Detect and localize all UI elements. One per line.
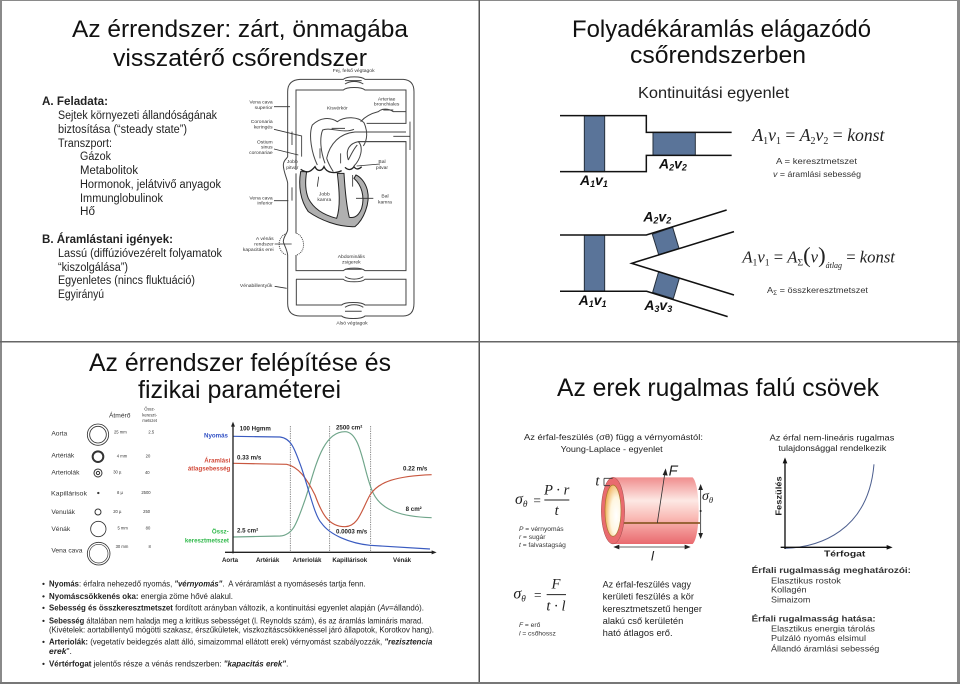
diagram: branching tube: v [594,292,603,308]
legend: formula symbols: r = sugár [519,534,546,541]
illustration: cylinder wall tension: F [669,464,679,480]
axes [225,424,433,553]
diagram labels: bronchiales [374,102,400,108]
formula: summed cross-section: v) [811,243,826,268]
ventricle wall [300,172,368,227]
table: vessel diameters and cross sections: Kapillárisok [51,490,88,497]
value labels: 100 Hgmm [240,425,271,432]
diagram labels: keringés [254,125,273,131]
diagram labels: sinus [261,145,273,151]
formula: continuity: A [799,125,811,145]
table: vessel diameters and cross sections: 8 [148,544,151,549]
diagram: stepped tube: 2 [681,162,687,172]
text block: bullet notes: Sebesség és összkeresztmetszet fordított arányban változik, a kontinuitási egyenlet alapján (Av=állandó). [49,603,424,613]
title: branching flow: csőrendszerben [630,42,806,69]
text block: A. function: Gázok [80,151,111,163]
diagram labels: Bal [381,194,389,200]
legend: continuity symbols [773,156,861,179]
series labels: Nyomás [204,432,229,439]
diagram labels: Fej, felső végtagok [333,68,375,74]
text block: A. function: Immunglobulinok [80,193,163,205]
diagram: branching tube [560,209,734,317]
table: vessel diameters and cross sections: 40 [145,470,150,475]
text block: wall tension definition: alakú cső kerületén [603,616,683,626]
text block: B. flow requirements: Egyenletes (nincs fluktuáció) [58,275,195,287]
diagram labels: Kisvérkör [327,106,348,112]
diagram labels: Jobb [287,159,298,165]
diagram labels: inferior [257,201,273,207]
diagram labels: Ostium [257,139,273,145]
table: vessel diameters and cross sections: 30 mm [116,544,129,549]
curve: pressure [233,436,430,549]
series labels [185,432,231,544]
diagram: branching tube: A [643,209,653,225]
table: vessel diameters and cross sections: Arteriolák [51,470,80,477]
chart: pressure, velocity and cross section along vessels [185,422,437,564]
diagram labels: kamra [317,197,331,203]
text block: effects of elasticity: Érfali rugalmasság hatása: [752,613,876,623]
text block: B. flow requirements: “kiszolgálása”) [58,262,128,274]
formula: tension from force: = [534,588,542,603]
formula: continuity [751,125,886,147]
value labels: 0.0003 m/s [336,528,368,535]
table: vessel diameters and cross sections: Artériák [51,452,75,459]
text block: determinants of elasticity: Simaizom [771,594,810,604]
text block: A. function: A. Feladata: [42,96,108,108]
curve: cross section [233,432,432,537]
text block: B. flow requirements: Lassú (diffúzióvezérelt folyamatok [58,248,222,260]
text block: A. function: Metabolitok [80,165,138,177]
text block: bullet notes: Nyomás: érfalra nehezedő nyomás, "vérnyomás". A véráramlást a nyomásesés tartja fenn. [49,579,366,589]
text block: wall tension definition: keresztmetszetű henger [603,604,702,614]
diagram: branching tube: 3 [654,304,659,314]
text block: determinants of elasticity: Kollagén [771,585,807,595]
illustration: cylinder wall tension: θ [709,495,714,505]
value labels [222,424,428,564]
diagram: branching tube: A [579,292,589,308]
diagram: branching tube: 1 [589,299,594,309]
text block: A. function: biztosítása (“steady state”) [58,124,187,136]
diagram: branching tube: 3 [667,304,672,314]
text block: A. function: Sejtek környezeti állandóságának [58,110,217,122]
diagram: stepped tube: v [595,172,604,188]
section: nonlinear elasticity [752,433,911,654]
table: vessel diameters and cross sections: 4 mm [117,453,128,458]
text block: bullet notes: Arteriolák: (vegetatív beidegzés alatt álló, simaizommal ellátott erek) vérnyomást szabályozzák, "rezisztencia [49,637,433,647]
table: vessel diameters and cross sections: 20 [146,453,151,458]
table: vessel diameters and cross sections: Össz- [144,406,156,411]
diagram: stepped tube: 1 [590,179,595,189]
text block: bullet notes: • [42,658,45,668]
formula: continuity: v [816,125,824,145]
diagram labels: Abdominális [338,254,365,260]
table: vessel diameters and cross sections: 80 [146,525,151,530]
diagram: stepped tube: v [674,155,683,171]
formula: summed cross-section: 1 [753,258,758,269]
table: vessel diameters and cross sections: 25 mm [114,429,127,434]
text block: effects of elasticity: Állandó áramlási sebesség [771,644,880,654]
legend: formula symbols: P = vérnyomás [519,526,564,533]
title: closed circulatory system: Az érrendszer: zárt, önmagába [72,16,408,43]
diagram labels: kamra [378,200,392,206]
heart valves [301,167,362,173]
diagram labels [240,68,400,327]
title: closed circulatory system [72,16,408,72]
illustration: cylinder wall tension: l [651,548,655,563]
diagram: branching tube: v [658,209,667,225]
legend: force symbols: F = erő [519,622,541,629]
diagram: stepped tube: 1 [603,179,608,189]
diagram: stepped tube: A [580,172,590,188]
formula: Young-Laplace: σ [515,491,523,508]
text block: effects of elasticity [752,613,880,654]
text block: bullet notes: erek". [49,646,72,656]
diagram labels: zsigerek [342,260,361,266]
series labels: keresztmetszet [185,537,229,544]
title: elastic-walled tubes: Az erek rugalmas falú csövek [557,374,879,402]
diagram labels: pitvar [376,165,388,171]
legend: summed cross-section: Σ [773,291,777,297]
formula: Young-Laplace: t [555,503,560,519]
formula: tension from force: θ [521,594,526,604]
table: vessel diameters and cross sections: 5 mm [117,525,128,530]
text block: effects of elasticity: Elasztikus energia tárolás [771,624,876,634]
text block: A. function: Transzport: [58,138,112,150]
table: vessel diameters and cross sections: Vénák [51,526,71,533]
curve: velocity [233,463,432,527]
diagram: branching tube: v [659,297,668,313]
title: structure of the circulatory system: Az érrendszer felépítése és [89,349,391,377]
diagram labels: Coronaria [251,119,273,125]
text block: B. flow requirements: B. Áramlástani igények: [42,233,173,246]
great vessels [311,118,406,172]
text block: bullet notes: Sebesség általában nem haladja meg a kritikus sebességet (l. Reynolds szám), és az áramlás lamináris marad. [49,615,423,625]
table: vessel diameters and cross sections [51,406,158,565]
section: wall tension and Young-Laplace [513,432,714,638]
title: structure of the circulatory system: fizikai paraméterei [138,376,341,404]
title: closed circulatory system: visszatérő csőrendszer [113,45,367,72]
panel: elastic vessel walls [513,374,911,654]
series labels: Áramlási [204,457,231,464]
formula: Young-Laplace: P · r [543,482,570,498]
formula: summed cross-section: konst [860,248,895,267]
series labels: Össz- [212,528,229,535]
formula: continuity: A [751,125,763,145]
table: vessel diameters and cross sections: Átmérő [109,410,131,419]
diagram labels: kapacitás erei [243,247,274,253]
diagram labels: superior [255,105,273,111]
diagram labels: pitvar [286,165,299,171]
formula: summed cross-section: = [842,248,860,267]
illustration: cylinder wall tension: t [595,474,600,490]
text block: bullet notes: • [42,591,45,601]
diagram labels: Vena cava [249,195,273,201]
table: vessel diameters and cross sections: metszet [142,418,158,423]
diagram: branching tube: A [644,297,654,313]
formula: continuity: 1 [776,136,781,147]
legend: force symbols [519,622,556,638]
legend: continuity symbols: v = áramlási sebesség [773,169,861,179]
text block: bullet notes [42,579,434,668]
panel: circulatory system overview [42,16,414,327]
text block: determinants of elasticity: Elasztikus rostok [771,575,842,585]
text block: bullet notes: • [42,579,45,589]
heart [300,118,406,227]
text block: wall tension definition [603,580,702,638]
formula: tension from force [513,577,566,614]
formula: summed cross-section: 1 [765,258,770,269]
table: vessel diameters and cross sections: Vena cava [51,547,83,554]
heading: nonlinear elasticity: Az érfal nem-lineáris rugalmas [770,433,895,443]
diagram labels: Alsó végtagok [336,321,368,327]
table: vessel diameters and cross sections: Aorta [51,430,68,437]
formula: summed cross-section: = [770,248,787,267]
formula: Young-Laplace: = [533,493,541,508]
series labels: átlagsebesség [188,466,231,473]
chart: circulation and heart diagram [240,68,414,327]
formula: continuity: = [828,125,847,145]
formula: tension from force: F [551,577,562,593]
diagram: branching tube: 2 [652,216,658,226]
diagram labels: Arteriae [378,97,396,103]
text block: bullet notes: Nyomáscsökkenés oka: energia zöme hővé alakul. [49,591,233,601]
chart: stress-volume curve: Térfogat [824,548,865,558]
diagram labels: Jobb [319,191,330,197]
formula: continuity: 2 [823,136,828,147]
value labels: 2.5 cm² [237,528,258,535]
diagram labels: rendszer [254,242,274,248]
value labels: 2500 cm² [336,424,362,431]
diagram labels: A vénás [256,236,274,242]
formula: summed cross-section [741,243,895,270]
value labels: 8 cm² [406,506,422,513]
table: vessel diameters and cross sections: 20 µ [113,509,122,514]
text block: bullet notes: Vértérfogat jelentős része a vénás rendszerben: "kapacitás erek". [49,658,288,668]
table: vessel diameters and cross sections: 2500 [141,490,151,495]
text block: B. flow requirements [42,233,222,301]
dotted vessel boundaries [290,426,371,553]
value labels: Arteriolák [293,557,322,564]
value labels: Kapillárisok [332,557,368,564]
formula: summed cross-section: A [786,248,798,267]
panel: structure and physical parameters [42,349,437,668]
text block: determinants of elasticity [752,565,911,604]
table: vessel diameters and cross sections: 8 µ [117,490,124,495]
formula: continuity: 1 [763,136,768,147]
heading: wall tension: Az érfal-feszülés (σθ) függ a vérnyomástól: [524,432,703,442]
diagram labels: Vénabillentyűk [240,283,273,289]
value labels: 0.33 m/s [237,454,262,461]
text block: B. flow requirements: Egyirányú [58,289,104,301]
title: branching flow [572,16,871,69]
text block: wall tension definition: kerületi feszülés a kör [603,592,694,602]
value labels: Artériák [256,557,280,564]
legend: force symbols: l = csőhossz [519,631,556,638]
table: vessel diameters and cross sections: 2.5 [148,429,155,434]
table: vessel diameters and cross sections: kereszt- [142,412,158,417]
title: structure of the circulatory system [89,349,391,404]
table: vessel diameters and cross sections: 250 [143,509,151,514]
legend: summed cross-section: = összkeresztmetszet [777,285,869,295]
diagram: stepped tube: 2 [668,162,674,172]
diagram: stepped tube [560,116,732,189]
heading: continuity equation: Kontinuitási egyenlet [638,85,790,102]
formula: continuity: konst [847,125,886,145]
diagram: branching tube: 2 [665,216,671,226]
legend: formula symbols: t = falvastagság [519,542,566,549]
text block: determinants of elasticity: Érfali rugalmasság meghatározói: [752,565,911,575]
formula: tension from force: σ [513,585,521,602]
legend: continuity symbols: A = keresztmetszet [776,156,858,166]
formula: Young-Laplace: θ [523,500,528,510]
callout lines and flow arrows [274,107,410,288]
text block: A. function: Hormonok, jelátvivő anyagok [80,179,221,191]
chart: stress-volume curve: Feszülés [773,476,783,516]
chart: stress-volume curve [773,457,893,558]
formula: continuity: 2 [811,136,816,147]
text block: bullet notes: • [42,637,45,647]
text block: bullet notes: • [42,615,45,625]
heading: wall tension [524,432,703,454]
formula: summed cross-section: A [741,248,753,267]
legend: formula symbols [519,526,566,549]
text block: effects of elasticity: Pulzáló nyomás elsimul [771,633,866,643]
heading: nonlinear elasticity: tulajdonsággal rendelkezik [778,443,887,453]
formula: tension from force: t · l [546,598,566,614]
text block: wall tension definition: ható átlagos erő. [603,628,673,638]
vessel loops [279,77,414,318]
diagram labels: Bal [378,159,386,165]
value labels: Vénák [393,557,412,564]
table: vessel diameters and cross sections: Venulák [51,509,76,516]
illustration: cylinder wall tension: σ [702,489,709,504]
heading: nonlinear elasticity [770,433,895,453]
diagram labels: coronariae [249,150,273,156]
heading: wall tension: Young-Laplace - egyenlet [561,444,663,454]
table: vessel diameters and cross sections: 30 µ [113,469,122,474]
title: branching flow: Folyadékáramlás elágazódó [572,16,871,43]
formula: summed cross-section: ( [803,243,811,268]
formula: continuity: = [781,125,800,145]
text block: A. function [42,96,221,218]
illustration: cylinder wall tension [595,464,714,563]
text block: bullet notes: (Kivételek: aortabillentyű mögötti szakasz, érszűkületek, viszkozitáscsökkenéssel járó állapotok, Korotkov hang). [49,625,434,635]
formula: Young-Laplace [515,482,570,519]
text block: wall tension definition: Az érfal-feszülés vagy [603,580,691,590]
panel: flow in branching tubes [560,16,895,317]
text block: A. function: Hő [80,206,95,218]
formula: continuity: v [768,125,776,145]
formula: summed cross-section: Σ [797,258,803,269]
formula: summed cross-section: átlag [826,261,842,270]
text block: bullet notes: • [42,603,45,613]
diagram labels: Vena cava [249,99,273,105]
value labels: 0.22 m/s [403,466,428,473]
diagram: branching tube: 1 [602,299,607,309]
value labels: Aorta [222,557,239,564]
legend: summed cross-section: A [767,285,773,295]
diagram: stepped tube: A [659,155,669,171]
formula: summed cross-section: v [757,248,765,267]
